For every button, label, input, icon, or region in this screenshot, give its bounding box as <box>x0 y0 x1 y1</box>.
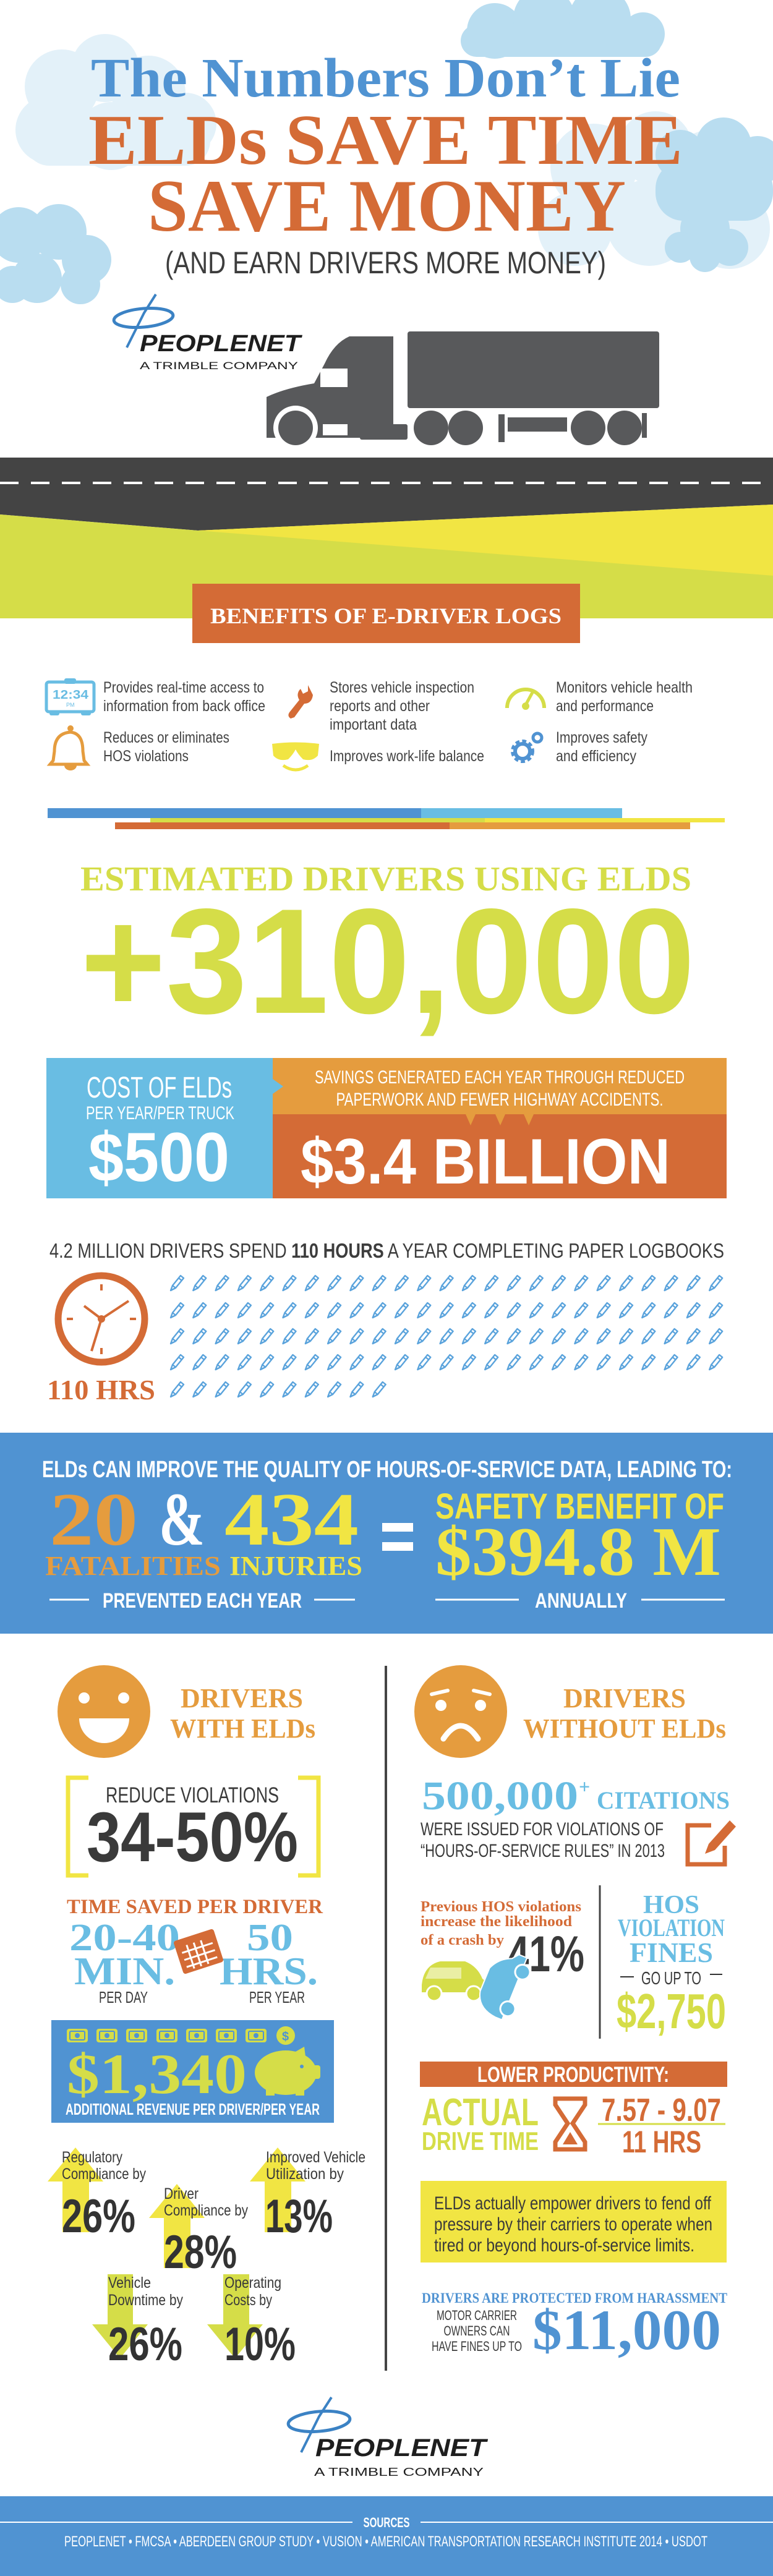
big number: 310,000: +310,000 <box>80 878 695 1045</box>
heading: drivers with ELDs: DRIVERS <box>181 1683 303 1713</box>
stat: 500,000 citations: CITATIONS <box>597 1786 730 1814</box>
panel: lower productivity: DRIVE TIME <box>422 2126 539 2156</box>
arrow: vehicle downtime: Downtime by <box>108 2292 183 2309</box>
banner: benefits heading: BENEFITS OF E-DRIVER LOGS <box>210 603 562 628</box>
benefit text col1: Provides real-time access to <box>103 679 264 696</box>
logo: peoplenet bottom: PEOPLENET <box>315 2434 489 2462</box>
panel: safety benefit band: FATALITIES <box>45 1551 221 1581</box>
footer: sources <box>0 2496 773 2576</box>
clouds <box>0 0 773 304</box>
stat: time saved values: 20-40 <box>69 1917 180 1959</box>
icon: clock display: PM <box>66 702 74 708</box>
icon: bell <box>50 725 87 770</box>
footer: sources: SOURCES <box>364 2515 409 2530</box>
stat: 500,000 citations <box>421 1773 730 1861</box>
road <box>0 458 773 618</box>
arrow: vehicle utilization <box>250 2147 365 2243</box>
heading: drivers without ELDs: WITHOUT ELDs <box>523 1713 726 1744</box>
benefit text col2: important data <box>330 716 417 733</box>
stat: time saved values: PER DAY <box>99 1988 148 2007</box>
logo: peoplenet top: PEOPLENET <box>140 331 302 357</box>
panel: safety benefit band <box>0 1433 773 1634</box>
arrow: operating costs: 10% <box>224 2318 296 2371</box>
chart: improvement arrows <box>48 2147 365 2371</box>
arrow: regulatory compliance <box>48 2147 146 2243</box>
benefit text col1: Reduces or eliminates <box>103 729 229 746</box>
title: SAVE MONEY <box>148 164 626 247</box>
stat: HOS violation fines: VIOLATION <box>618 1914 725 1942</box>
benefit text col1 <box>103 679 265 765</box>
arrow: vehicle utilization: 13% <box>265 2190 333 2243</box>
icon: gauge <box>507 689 544 710</box>
panel: lower productivity: 11 HRS <box>622 2125 701 2159</box>
callout: empower drivers <box>421 2181 727 2263</box>
icon: wrench <box>288 685 313 719</box>
panel: cost and savings: PAPERWORK AND FEWER HIGHWAY ACCIDENTS. <box>336 1090 663 1110</box>
panel: safety benefit band: 20 <box>49 1478 138 1561</box>
heading: time saved: TIME SAVED PER DRIVER <box>67 1896 323 1918</box>
callout: empower drivers: ELDs actually empower drivers to fend off <box>434 2193 712 2214</box>
stat: harassment fines <box>422 2290 727 2361</box>
icon: truck <box>267 331 659 450</box>
heading: drivers without ELDs <box>523 1683 726 1744</box>
panel: additional revenue: $1,340 <box>67 2042 247 2105</box>
arrow: operating costs <box>207 2274 296 2371</box>
title: The Numbers Don’t Lie <box>91 48 680 109</box>
arrow: vehicle utilization: Utilization by <box>266 2165 344 2183</box>
stat: crash likelihood <box>421 1899 584 2023</box>
panel: additional revenue: $ <box>282 2030 289 2044</box>
stat: 500,000 citations: 500,000 <box>422 1773 578 1819</box>
stat: 500,000 citations: WERE ISSUED FOR VIOLATIONS OF <box>421 1819 664 1840</box>
callout: reduce violations: REDUCE VIOLATIONS <box>106 1783 279 1807</box>
icon: gears <box>513 733 542 761</box>
benefit text col3: Monitors vehicle health <box>556 679 693 696</box>
heading: estimated drivers: ESTIMATED DRIVERS USING ELDS <box>80 860 691 898</box>
stat: 500,000 citations: + <box>579 1775 590 1798</box>
stat: time saved values: 50 <box>247 1917 293 1959</box>
icon: clock <box>58 1276 145 1362</box>
benefit text col3 <box>556 679 693 765</box>
stat: time saved values: HRS. <box>220 1949 318 1993</box>
benefit text col2: Improves work-life balance <box>330 748 484 765</box>
subtitle: (AND EARN DRIVERS MORE MONEY) <box>165 245 606 280</box>
panel: benefits list <box>46 678 693 770</box>
stat: time saved values <box>69 1917 318 2007</box>
logo: peoplenet top <box>113 294 302 372</box>
chart: pencils 110 <box>171 1276 722 1397</box>
stat: time saved values: PER YEAR <box>249 1988 305 2007</box>
label: 110 hrs: 110 HRS <box>47 1375 155 1405</box>
panel: safety benefit band: INJURIES <box>229 1551 362 1581</box>
panel: cost and savings <box>46 1058 727 1198</box>
callout: empower drivers: pressure by their carriers to operate when <box>434 2214 712 2235</box>
panel: cost and savings: PER YEAR/PER TRUCK <box>86 1103 234 1124</box>
panel: safety benefit band: & <box>159 1478 205 1561</box>
stat: HOS violation fines: $2,750 <box>617 1984 726 2039</box>
arrow: driver compliance: 28% <box>164 2226 237 2279</box>
heading: drivers with ELDs <box>170 1683 315 1744</box>
arrow: regulatory compliance: 26% <box>62 2190 135 2243</box>
arrow: driver compliance: Compliance by <box>164 2202 248 2219</box>
stat: crash likelihood: increase the likelihood <box>421 1914 573 1930</box>
stat: HOS violation fines <box>617 1891 726 2039</box>
benefit text col2 <box>330 679 484 765</box>
benefit text col2: reports and other <box>330 697 430 715</box>
icon: sad face <box>414 1665 507 1758</box>
callout: reduce violations: 34-50% <box>87 1798 298 1877</box>
stat: HOS violation fines: GO UP TO <box>641 1969 701 1989</box>
icon: clock display <box>46 678 94 715</box>
icon: happy face <box>58 1665 150 1758</box>
banner: benefits heading <box>192 584 580 643</box>
benefit text col3: and performance <box>556 697 654 715</box>
logo: peoplenet top: A TRIMBLE COMPANY <box>140 360 298 372</box>
stat: crash likelihood: 41% <box>508 1926 584 1982</box>
stat: crash likelihood: Previous HOS violations <box>421 1899 581 1915</box>
benefit text col2: Stores vehicle inspection <box>330 679 474 696</box>
stat: 500,000 citations: “HOURS-OF-SERVICE RULES” IN 2013 <box>421 1841 665 1861</box>
panel: lower productivity: LOWER PRODUCTIVITY: <box>477 2063 669 2087</box>
panel: lower productivity: 7.57 - 9.07 <box>602 2092 721 2128</box>
logo: peoplenet bottom <box>288 2397 489 2478</box>
stat: harassment fines: $11,000 <box>532 2298 721 2361</box>
arrow: driver compliance: Driver <box>164 2185 199 2203</box>
arrow: regulatory compliance: Compliance by <box>62 2165 146 2183</box>
arrow: vehicle downtime: 26% <box>108 2318 182 2371</box>
stat: HOS violation fines: FINES <box>630 1937 713 1968</box>
arrow: operating costs: Costs by <box>224 2292 272 2309</box>
stat: time saved values: MIN. <box>74 1949 175 1993</box>
panel: additional revenue: ADDITIONAL REVENUE PER DRIVER/PER YEAR <box>66 2100 320 2118</box>
panel: cost and savings: $3.4 BILLION <box>301 1126 670 1198</box>
panel: lower productivity: ACTUAL <box>422 2091 539 2134</box>
icon: sunglasses <box>272 742 319 770</box>
arrow: vehicle downtime: Vehicle <box>108 2274 151 2292</box>
stat: harassment fines: HAVE FINES UP TO <box>432 2339 522 2354</box>
panel: lower productivity <box>420 2062 727 2159</box>
stat: HOS violation fines: HOS <box>643 1891 699 1919</box>
benefit text col3: and efficiency <box>556 748 636 765</box>
stat: harassment fines: OWNERS CAN <box>444 2323 510 2339</box>
panel: safety benefit band: $394.8 M <box>435 1514 721 1590</box>
title: ELDs SAVE TIME <box>88 101 683 180</box>
heading: drivers without ELDs: DRIVERS <box>563 1683 686 1713</box>
panel: cost and savings: COST OF ELDs <box>87 1072 232 1104</box>
title <box>88 48 683 247</box>
logo: peoplenet bottom: A TRIMBLE COMPANY <box>314 2466 484 2478</box>
stat: harassment fines: MOTOR CARRIER <box>437 2308 517 2323</box>
benefit text col1: HOS violations <box>103 748 189 765</box>
heading: drivers with ELDs: WITH ELDs <box>170 1713 315 1744</box>
icon: note with pencil <box>688 1820 736 1864</box>
panel: safety benefit band: PREVENTED EACH YEAR <box>103 1589 302 1613</box>
callout: empower drivers: tired or beyond hours-of-service limits. <box>434 2235 694 2256</box>
arrow: operating costs: Operating <box>224 2274 281 2292</box>
panel: cost and savings: $500 <box>88 1119 229 1196</box>
benefit text col3: Improves safety <box>556 729 647 746</box>
arrow: vehicle utilization: Improved Vehicle <box>266 2149 365 2166</box>
arrow: driver compliance <box>149 2184 248 2279</box>
stat: harassment fines: DRIVERS ARE PROTECTED FROM HARASSMENT <box>422 2290 727 2306</box>
panel: safety benefit band: 434 <box>224 1478 359 1561</box>
arrow: vehicle downtime <box>92 2274 183 2371</box>
stat: crash likelihood: of a crash by <box>421 1932 504 1948</box>
panel: additional revenue <box>51 2020 334 2123</box>
arrow: regulatory compliance: Regulatory <box>62 2149 122 2166</box>
icon: clock display: 12:34 <box>53 688 89 702</box>
benefit text col1: information from back office <box>103 697 265 715</box>
panel: safety benefit band: ANNUALLY <box>535 1589 627 1613</box>
